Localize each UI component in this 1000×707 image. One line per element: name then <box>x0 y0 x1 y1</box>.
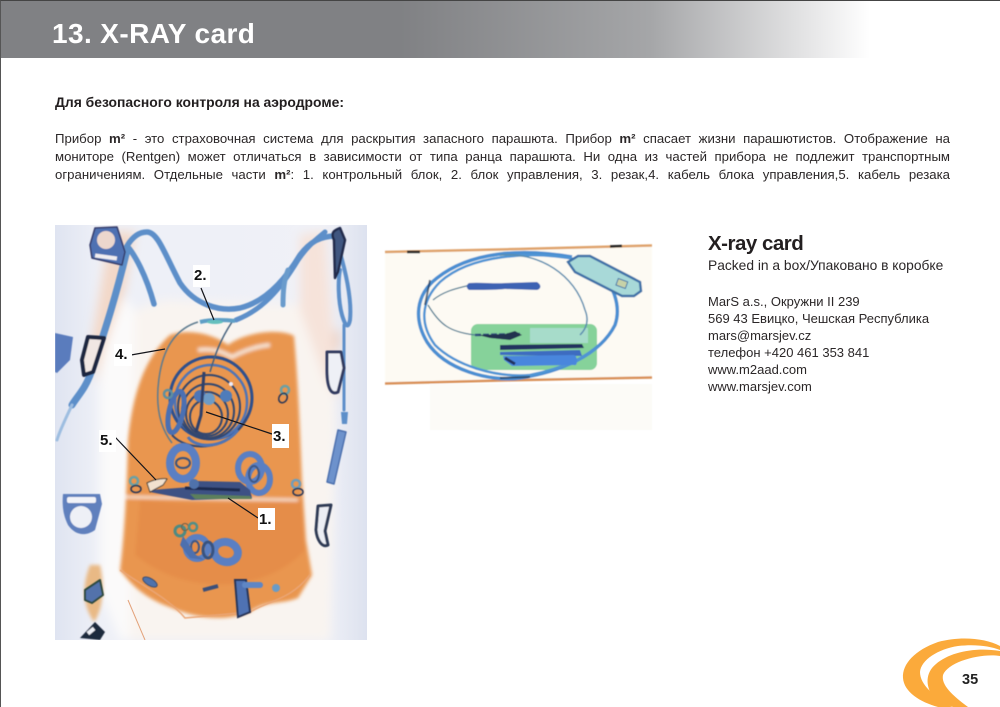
contact details: www.m2aad.com <box>708 362 807 377</box>
intro text: Прибор m² - это страховочная система для раскрытия запасного парашюта. Прибор m² спасает жизни парашютистов. Отображение на <box>55 131 950 146</box>
logo swoosh <box>903 639 1000 707</box>
x-ray image: packed X-ray card in box <box>385 246 652 430</box>
title: 13. X-RAY card <box>52 18 255 49</box>
orange packed canopy <box>84 332 312 622</box>
loop cables <box>419 253 617 379</box>
main coil of cutter cable <box>165 357 252 446</box>
part labels: 2. <box>194 267 207 284</box>
harness buckles <box>55 227 348 640</box>
contact details: www.marsjev.com <box>708 379 812 394</box>
contact details: mars@marsjev.cz <box>708 328 811 343</box>
green pack <box>471 324 597 370</box>
x-ray image: parachute container with labelled parts <box>55 225 367 640</box>
lower ring cluster <box>175 523 240 565</box>
intro text <box>55 131 950 182</box>
part labels <box>99 265 289 530</box>
part labels: 3. <box>273 428 286 445</box>
leader lines <box>115 288 272 518</box>
packaging note: Packed in a box/Упаковано в коробке <box>708 258 943 273</box>
product heading: X-ray card <box>708 232 803 255</box>
contact details: 569 43 Евицко, Чешская Республика <box>708 311 929 326</box>
control and cutter cables <box>158 322 198 443</box>
cutter tube <box>467 282 540 290</box>
intro text: ограничениям. Отдельные части m²: 1. контрольный блок, 2. блок управления, 3. резак,4. кабель блока управления,5. кабель резака <box>55 167 950 182</box>
hoses <box>57 232 350 440</box>
control box at top right <box>568 256 641 296</box>
page number: 35 <box>962 672 978 688</box>
part labels: 1. <box>259 511 272 528</box>
control unit and rings <box>130 386 303 496</box>
intro heading: Для безопасного контроля на аэродроме: <box>55 94 344 110</box>
contact details <box>708 294 930 394</box>
intro text: мониторе (Rentgen) может отличаться в зависимости от типа ранца парашюта. Ни одна из частей прибора не подлежит транспортным <box>55 149 950 164</box>
part labels: 4. <box>115 346 128 363</box>
contact details: телефон +420 461 353 841 <box>708 345 869 360</box>
contact details: MarS a.s., Окружни II 239 <box>708 294 860 309</box>
header band <box>0 0 1000 58</box>
control unit components <box>500 344 584 350</box>
part labels: 5. <box>100 432 113 449</box>
